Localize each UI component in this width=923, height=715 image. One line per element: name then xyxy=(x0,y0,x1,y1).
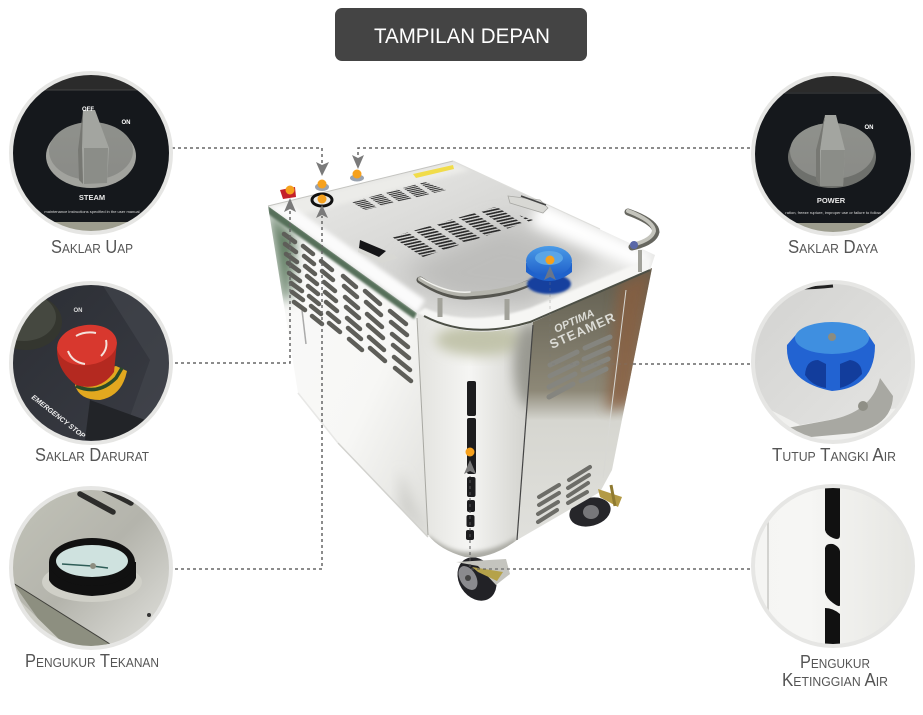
knob xyxy=(46,110,136,188)
photo: power switch xyxy=(751,72,915,237)
photo: emergency stop: EMERGENCY STOP xyxy=(30,394,86,440)
gauge xyxy=(42,538,142,602)
label: saklar darurat: Saklar Darurat xyxy=(35,445,149,465)
yellow warning sticker xyxy=(413,165,454,178)
label: pengukur tekanan: Pengukur Tekanan xyxy=(25,651,159,671)
photo: water level glass xyxy=(751,484,915,648)
label: tutup tangki air: Tutup Tangki Air xyxy=(772,445,896,465)
knob xyxy=(788,115,876,188)
label: pengukur ketinggian air: Pengukur xyxy=(800,652,870,672)
blue tank cap xyxy=(526,246,572,294)
brand logo: STEAMER xyxy=(547,309,618,352)
control slot xyxy=(358,240,398,263)
photo: power switch: POWER xyxy=(817,196,846,205)
label: saklar daya: Saklar Daya xyxy=(788,237,878,257)
photo: power switch: ration, freeze rupture, improper use or failure to follow xyxy=(785,210,881,215)
front panel xyxy=(416,313,533,558)
large top vents xyxy=(392,207,533,257)
callout: tutup tangki air connector xyxy=(544,256,750,364)
photo: emergency stop: ON xyxy=(74,308,82,314)
rear wheel xyxy=(566,493,614,531)
front caster wheel xyxy=(450,550,510,608)
photo: steam switch xyxy=(9,71,173,236)
front rail xyxy=(420,270,650,330)
photo: steam switch: OFF xyxy=(82,107,94,113)
callout: pengukur ketinggian air connector xyxy=(464,448,750,569)
left side vents xyxy=(284,234,411,381)
left side panel xyxy=(268,205,428,537)
label: pengukur ketinggian air: Ketinggian Air xyxy=(782,670,888,690)
right side panel xyxy=(517,268,652,540)
callout: saklar daya connector xyxy=(352,148,750,178)
steam machine illustration xyxy=(268,161,656,608)
side vents upper xyxy=(549,337,610,397)
photo: steam switch: ON xyxy=(122,120,130,126)
dial corner xyxy=(14,300,62,350)
callout: saklar uap connector xyxy=(172,148,329,188)
photo: pressure gauge xyxy=(9,486,173,650)
top plate xyxy=(268,161,656,332)
label: saklar uap: Saklar Uap xyxy=(51,237,133,257)
photo: steam switch: maintenance instructions specified in the user manual xyxy=(44,209,140,214)
title banner: TAMPILAN DEPAN xyxy=(374,25,550,48)
steel plate xyxy=(787,378,893,438)
blue cap xyxy=(787,322,875,391)
photo: water tank cap xyxy=(751,280,915,444)
water level sight glass xyxy=(466,381,476,540)
side vents lower xyxy=(538,467,590,522)
callout: pengukur tekanan connector xyxy=(175,194,328,569)
photo: steam switch: STEAM xyxy=(79,193,105,202)
title banner xyxy=(335,8,587,61)
rear grab handle xyxy=(508,196,548,213)
side rail xyxy=(628,211,656,272)
photo: power switch: ON xyxy=(864,125,874,131)
red stop button xyxy=(55,321,127,400)
small top vents xyxy=(352,182,446,210)
valve xyxy=(598,485,622,507)
black sight strip xyxy=(825,484,840,648)
brand logo: OPTIMA xyxy=(552,307,596,336)
label: pengukur ketinggian air xyxy=(782,652,888,690)
top controls xyxy=(280,174,364,206)
photo: emergency stop xyxy=(0,281,173,445)
callout: saklar darurat connector xyxy=(175,186,296,363)
